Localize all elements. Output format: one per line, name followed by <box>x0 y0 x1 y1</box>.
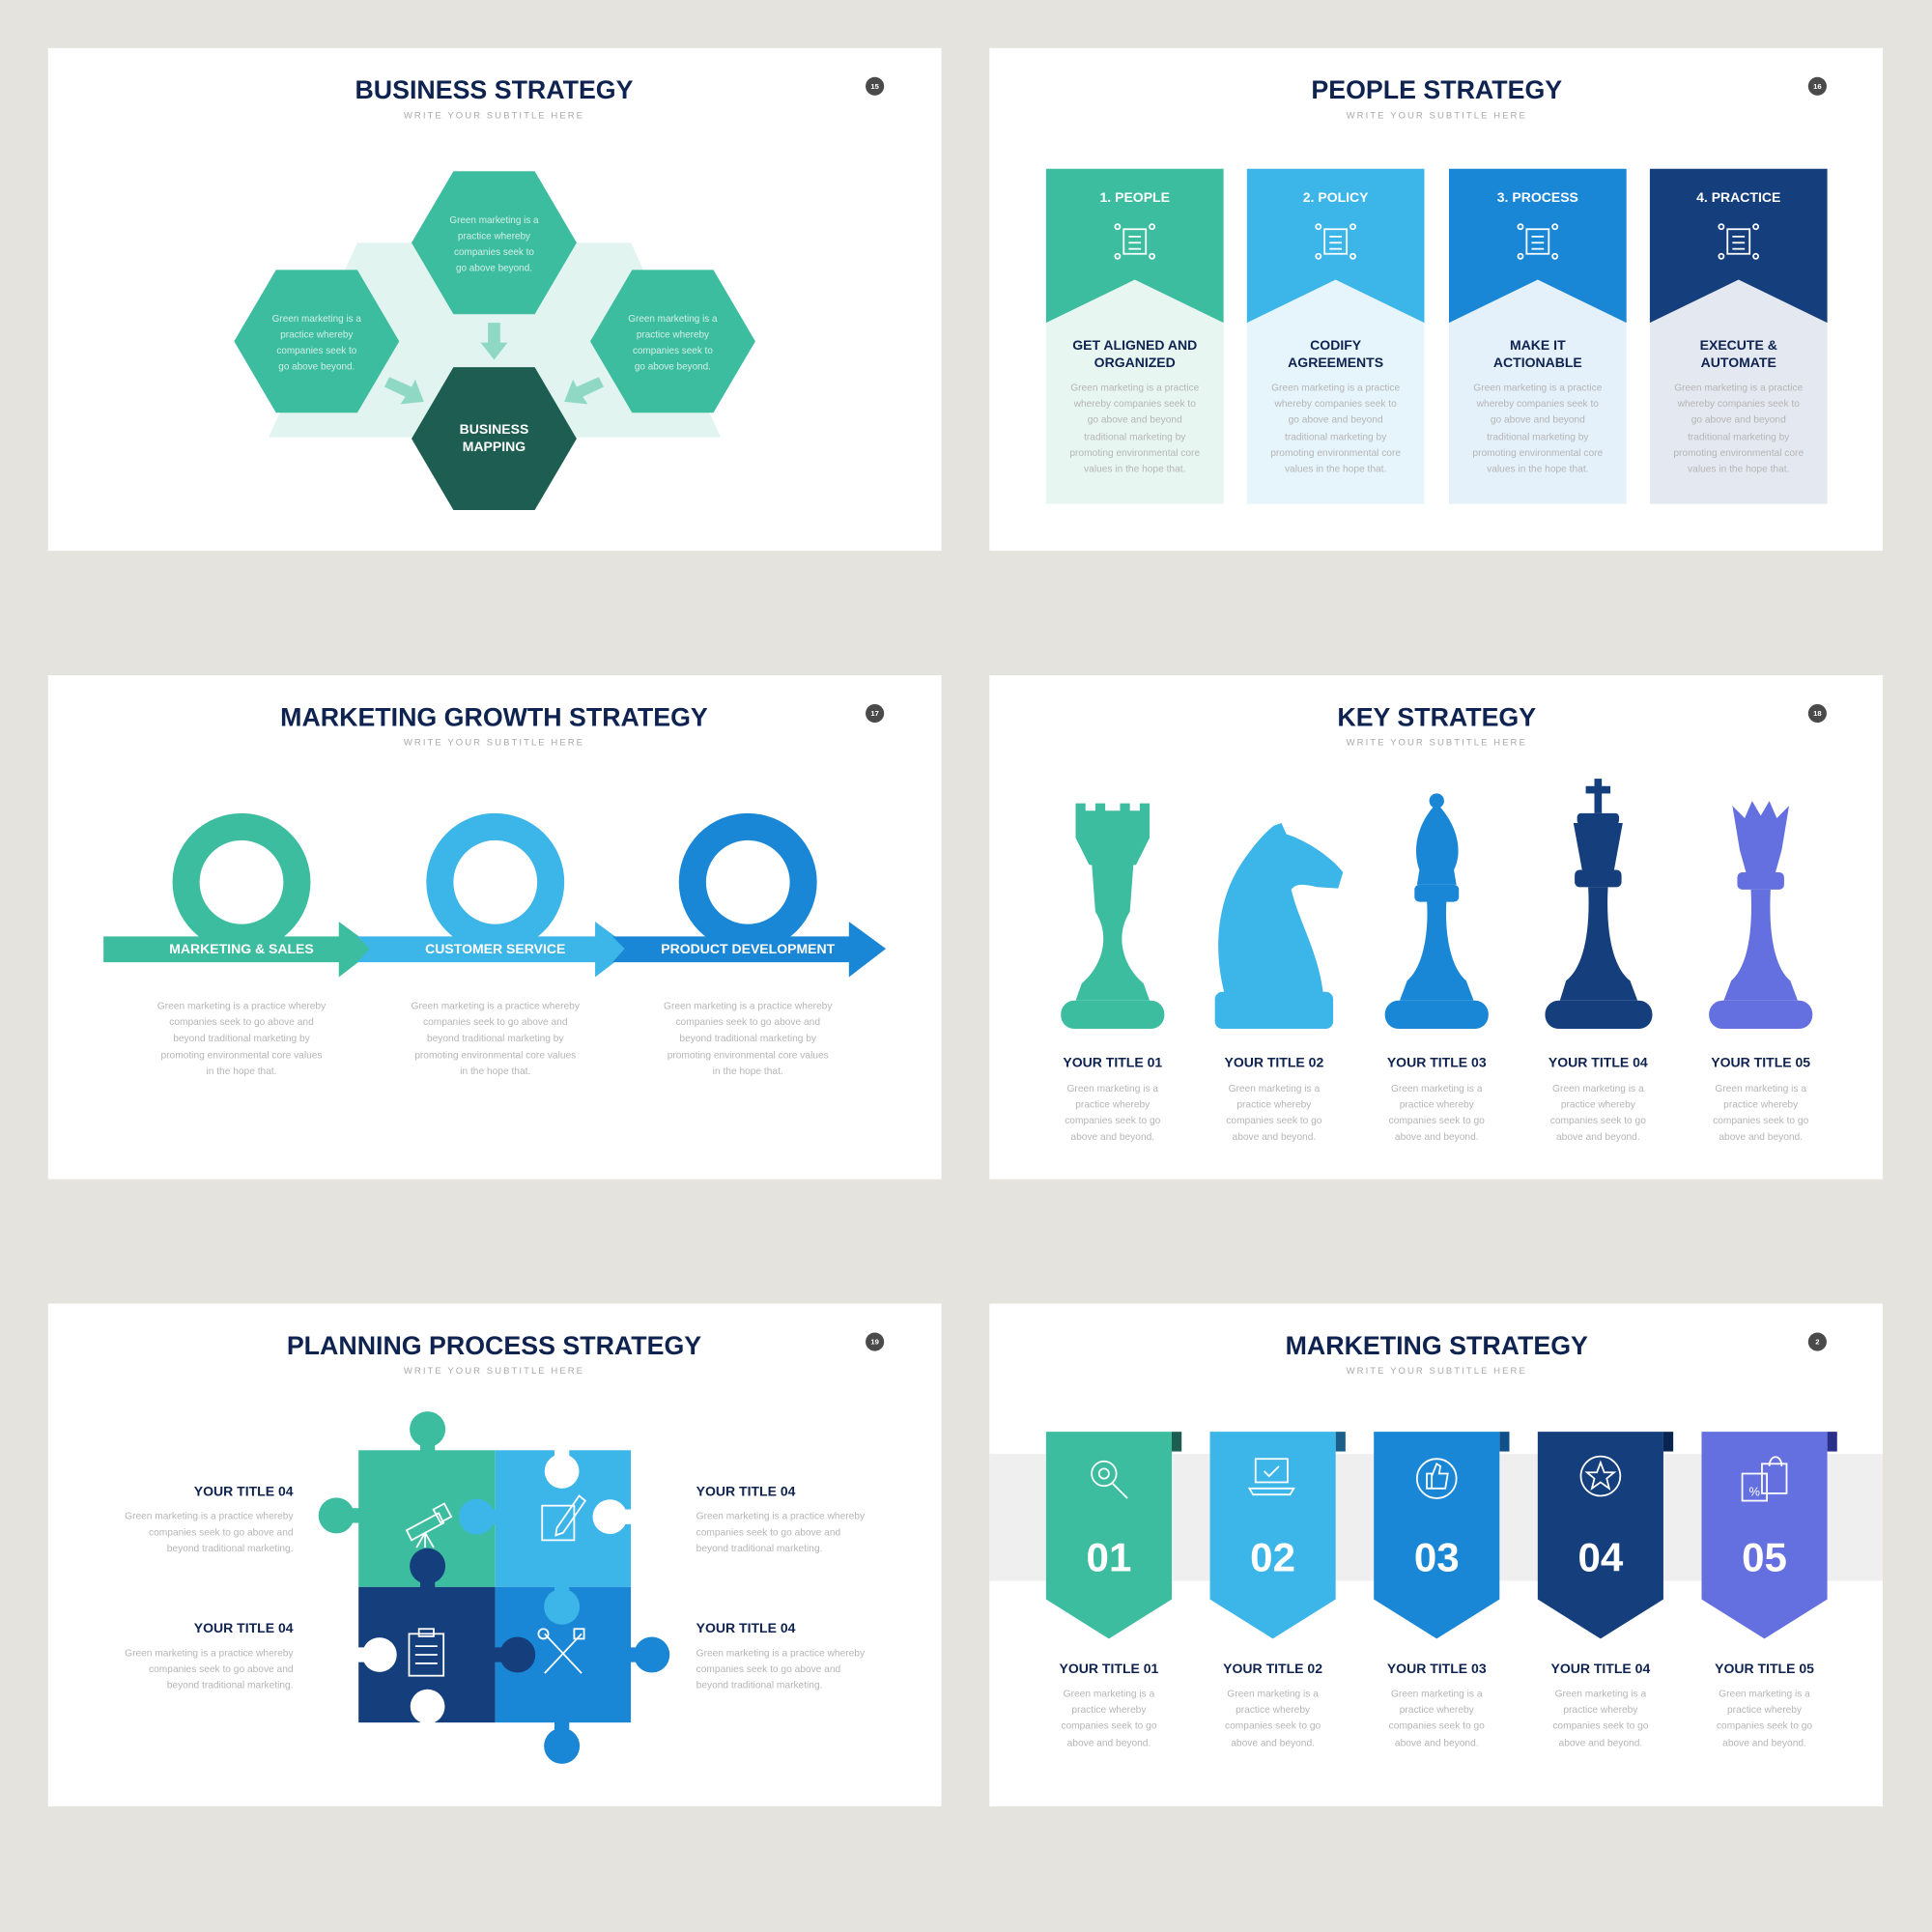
title: PLANNING PROCESS STRATEGY <box>287 1331 701 1360</box>
chess labels: practice whereby <box>1075 1100 1151 1111</box>
text: col 1: in the hope that. <box>206 1066 277 1077</box>
ribbon 04 <box>1538 1432 1673 1638</box>
text: left bottom: beyond traditional marketing. <box>167 1680 294 1690</box>
chess labels: companies seek to go <box>1550 1116 1646 1126</box>
chess: knight <box>1215 823 1343 1029</box>
ring: light blue <box>440 827 551 938</box>
ribbon labels: YOUR TITLE 05 <box>1715 1661 1814 1676</box>
text: col 1: beyond traditional marketing by <box>173 1034 311 1044</box>
column: people: 1. PEOPLE <box>1100 189 1170 205</box>
column: people: GET ALIGNED AND <box>1072 337 1197 353</box>
page number <box>866 704 884 723</box>
column: practice: AUTOMATE <box>1701 355 1776 370</box>
column: practice: Green marketing is a practice <box>1674 383 1804 393</box>
text: right top <box>696 1483 866 1554</box>
arrow: product development <box>612 922 886 977</box>
column: people: traditional marketing by <box>1084 432 1186 442</box>
chess labels: Green marketing is a <box>1715 1084 1806 1094</box>
chess labels: YOUR TITLE 01 <box>1063 1055 1162 1070</box>
column: practice: 4. PRACTICE <box>1696 189 1780 205</box>
column: process: ACTIONABLE <box>1493 355 1582 370</box>
text: col 2 <box>412 1002 581 1077</box>
ribbon labels: companies seek to go <box>1061 1721 1157 1732</box>
chess labels: Green marketing is a <box>1391 1084 1483 1094</box>
column: people: values in the hope that. <box>1084 465 1185 475</box>
ribbon labels: companies seek to go <box>1717 1721 1812 1732</box>
column: practice: traditional marketing by <box>1688 432 1790 442</box>
hexagon: right: practice whereby <box>637 329 709 340</box>
text: right bottom <box>696 1620 866 1690</box>
chess labels: above and beyond. <box>1556 1132 1640 1143</box>
text: col 2: promoting environmental core values <box>414 1051 576 1062</box>
arrow: customer service: CUSTOMER SERVICE <box>425 941 565 956</box>
column: people: whereby companies seek to <box>1073 399 1196 410</box>
text: right bottom: beyond traditional marketing. <box>696 1680 822 1690</box>
ribbon 05: 05 <box>1742 1534 1787 1579</box>
hexagon: left <box>234 270 399 412</box>
text: right bottom: Green marketing is a practice whereby <box>696 1648 866 1659</box>
panel: marketing growth strategy <box>48 675 941 1179</box>
column: people <box>1046 169 1224 504</box>
chess labels: practice whereby <box>1400 1100 1475 1111</box>
subtitle: WRITE YOUR SUBTITLE HERE <box>1347 1366 1527 1377</box>
page number: 19 <box>870 1338 879 1347</box>
hexagon: top: practice whereby <box>458 231 530 242</box>
text: col 2: in the hope that. <box>460 1066 530 1077</box>
chess labels: above and beyond. <box>1719 1132 1803 1143</box>
chess labels: companies seek to go <box>1226 1116 1322 1126</box>
text: col 3: beyond traditional marketing by <box>679 1034 817 1044</box>
subtitle: WRITE YOUR SUBTITLE HERE <box>1347 738 1527 749</box>
chess labels: above and beyond. <box>1233 1132 1316 1143</box>
chess labels: practice whereby <box>1236 1100 1312 1111</box>
arrow: marketing & sales <box>103 922 376 977</box>
hexagon: business mapping: MAPPING <box>463 439 526 454</box>
knobs <box>410 1411 445 1447</box>
column: process: values in the hope that. <box>1487 465 1589 475</box>
column: process: traditional marketing by <box>1487 432 1589 442</box>
panel: key strategy <box>989 675 1883 1179</box>
title: MARKETING STRATEGY <box>1286 1331 1588 1360</box>
hexagon: top: companies seek to <box>454 247 534 258</box>
column: policy: CODIFY <box>1310 337 1362 353</box>
hexagon: top: Green marketing is a <box>449 215 539 226</box>
column: process: promoting environmental core <box>1472 448 1604 459</box>
arrow: customer service <box>357 922 632 977</box>
ring: blue <box>693 827 804 938</box>
column: practice: go above and beyond <box>1691 414 1786 425</box>
column: policy: promoting environmental core <box>1270 448 1401 459</box>
ribbon labels: Green marketing is a <box>1719 1689 1810 1699</box>
chess labels: Green marketing is a <box>1067 1084 1158 1094</box>
text: right top: Green marketing is a practice whereby <box>696 1512 866 1522</box>
gray band <box>989 1454 1883 1580</box>
ribbon labels: companies seek to go <box>1552 1721 1649 1732</box>
ribbon 02: 02 <box>1250 1534 1295 1579</box>
ribbon labels: Green marketing is a <box>1064 1689 1155 1699</box>
column: practice: EXECUTE & <box>1700 337 1777 353</box>
ribbon labels: above and beyond. <box>1067 1738 1151 1748</box>
panel: people strategy <box>989 48 1883 551</box>
text: left bottom <box>125 1620 294 1690</box>
chess labels <box>1063 1055 1810 1143</box>
ribbon labels: companies seek to go <box>1389 1721 1485 1732</box>
page number: 16 <box>1813 82 1822 91</box>
ribbon labels: YOUR TITLE 01 <box>1060 1661 1159 1676</box>
ribbon 01: 01 <box>1087 1534 1131 1579</box>
page number: 17 <box>870 709 879 718</box>
panel: planning process strategy <box>48 1303 941 1806</box>
column: practice: values in the hope that. <box>1688 465 1789 475</box>
chess labels: YOUR TITLE 03 <box>1387 1055 1487 1070</box>
ribbon labels: YOUR TITLE 02 <box>1223 1661 1322 1676</box>
hexagon: right <box>590 270 755 412</box>
subtitle: WRITE YOUR SUBTITLE HERE <box>404 738 584 749</box>
chess labels: Green marketing is a <box>1552 1084 1644 1094</box>
ribbon labels: above and beyond. <box>1395 1738 1479 1748</box>
title: BUSINESS STRATEGY <box>355 75 634 104</box>
panel: marketing strategy <box>989 1303 1883 1806</box>
puzzle <box>319 1411 669 1764</box>
column: people: go above and beyond <box>1088 414 1182 425</box>
column: practice <box>1650 169 1828 504</box>
text: col 1 <box>157 1002 327 1077</box>
subtitle: WRITE YOUR SUBTITLE HERE <box>1347 110 1527 121</box>
arrow: left <box>384 377 424 404</box>
column: process: Green marketing is a practice <box>1473 383 1603 393</box>
ribbon 02 <box>1210 1432 1346 1638</box>
text: col 1: Green marketing is a practice whereby <box>157 1002 327 1012</box>
hexagon: left: go above beyond. <box>278 362 355 373</box>
column: policy: 2. POLICY <box>1303 189 1369 205</box>
ribbon labels: practice whereby <box>1236 1705 1311 1716</box>
page number <box>866 1332 884 1351</box>
text: right top: YOUR TITLE 04 <box>696 1483 796 1498</box>
page number <box>1808 1332 1827 1351</box>
text: left bottom: companies seek to go above and <box>149 1664 294 1675</box>
ribbon 03: 03 <box>1414 1534 1460 1579</box>
text: col 1: promoting environmental core values <box>160 1051 323 1062</box>
page number <box>1808 704 1827 723</box>
column: policy <box>1247 169 1424 504</box>
ribbon labels: practice whereby <box>1727 1705 1803 1716</box>
chess labels: Green marketing is a <box>1229 1084 1320 1094</box>
ribbon labels: practice whereby <box>1563 1705 1638 1716</box>
chess labels: YOUR TITLE 05 <box>1711 1055 1810 1070</box>
chess labels: practice whereby <box>1561 1100 1636 1111</box>
column: policy: whereby companies seek to <box>1274 399 1397 410</box>
icon: telescope <box>407 1504 451 1548</box>
column: process: MAKE IT <box>1510 337 1566 353</box>
arrow: down <box>480 323 508 359</box>
ribbon 05 <box>1701 1432 1837 1638</box>
text: right bottom: companies seek to go above and <box>696 1664 841 1675</box>
title: MARKETING GROWTH STRATEGY <box>280 702 708 731</box>
text: left top <box>125 1483 294 1554</box>
column: practice: whereby companies seek to <box>1677 399 1800 410</box>
chess labels: companies seek to go <box>1713 1116 1809 1126</box>
text: left bottom: Green marketing is a practice whereby <box>125 1648 294 1659</box>
column: people: promoting environmental core <box>1069 448 1200 459</box>
ribbon 01 <box>1046 1432 1181 1638</box>
chess labels: companies seek to go <box>1389 1116 1485 1126</box>
text: col 3: Green marketing is a practice whereby <box>664 1002 833 1012</box>
text: col 2: companies seek to go above and <box>423 1017 568 1028</box>
panel: business strategy <box>48 48 941 551</box>
text: right top: beyond traditional marketing. <box>696 1544 822 1554</box>
page number: 2 <box>1815 1338 1820 1347</box>
text: col 3: promoting environmental core values <box>668 1051 829 1062</box>
page number <box>1808 77 1827 96</box>
text: col 2: beyond traditional marketing by <box>427 1034 564 1044</box>
column: process: whereby companies seek to <box>1476 399 1599 410</box>
ribbon labels: Green marketing is a <box>1555 1689 1646 1699</box>
column: process <box>1449 169 1627 504</box>
column: policy: Green marketing is a practice <box>1271 383 1401 393</box>
icon: pencil note <box>542 1495 585 1540</box>
chess labels: practice whereby <box>1723 1100 1799 1111</box>
text: left top: Green marketing is a practice whereby <box>125 1512 294 1522</box>
hexagon: right: Green marketing is a <box>628 314 718 325</box>
ribbon 05: % <box>1749 1484 1760 1498</box>
text: col 3 <box>664 1002 833 1077</box>
ring: green <box>186 827 297 938</box>
column: policy: go above and beyond <box>1289 414 1383 425</box>
text: col 3: companies seek to go above and <box>675 1017 820 1028</box>
column: people: ORGANIZED <box>1094 355 1176 370</box>
chess labels: companies seek to go <box>1065 1116 1161 1126</box>
ribbon labels: above and beyond. <box>1559 1738 1642 1748</box>
column: policy: AGREEMENTS <box>1288 355 1383 370</box>
column: process: 3. PROCESS <box>1497 189 1578 205</box>
text: col 1: companies seek to go above and <box>169 1017 314 1028</box>
page number: 15 <box>870 82 880 91</box>
title: KEY STRATEGY <box>1337 702 1536 731</box>
ribbon labels: above and beyond. <box>1231 1738 1315 1748</box>
icon: tools <box>538 1629 584 1673</box>
ribbon labels: YOUR TITLE 04 <box>1550 1661 1650 1676</box>
ribbon labels: practice whereby <box>1071 1705 1147 1716</box>
column: process: go above and beyond <box>1491 414 1585 425</box>
subtitle: WRITE YOUR SUBTITLE HERE <box>404 1366 584 1377</box>
text: col 2: Green marketing is a practice whereby <box>412 1002 581 1012</box>
text: right bottom: YOUR TITLE 04 <box>696 1620 796 1635</box>
hexagon: right: companies seek to <box>633 346 713 356</box>
text: left top: beyond traditional marketing. <box>167 1544 294 1554</box>
hexagon: right: go above beyond. <box>635 362 711 373</box>
chess labels: YOUR TITLE 04 <box>1548 1055 1648 1070</box>
subtitle: WRITE YOUR SUBTITLE HERE <box>404 110 584 121</box>
text: left top: YOUR TITLE 04 <box>194 1483 294 1498</box>
hexagon: top: go above beyond. <box>456 264 532 274</box>
column: practice: promoting environmental core <box>1673 448 1804 459</box>
text: left top: companies seek to go above and <box>149 1527 294 1538</box>
ribbon labels: Green marketing is a <box>1227 1689 1319 1699</box>
hexagon: left: Green marketing is a <box>272 314 361 325</box>
chess labels: YOUR TITLE 02 <box>1224 1055 1323 1070</box>
page number <box>866 77 884 96</box>
title: PEOPLE STRATEGY <box>1311 75 1562 104</box>
arrow: product development: PRODUCT DEVELOPMENT <box>661 941 836 956</box>
text: col 3: in the hope that. <box>713 1066 783 1077</box>
hexagon: left: practice whereby <box>280 329 353 340</box>
ribbon labels: above and beyond. <box>1722 1738 1806 1748</box>
text: left bottom: YOUR TITLE 04 <box>194 1620 294 1635</box>
ribbon labels: YOUR TITLE 03 <box>1387 1661 1487 1676</box>
arrow: right <box>564 377 604 404</box>
hexagon: business mapping: BUSINESS <box>460 421 528 437</box>
hexagon: business mapping <box>412 367 577 510</box>
chess: rook <box>1061 804 1164 1029</box>
chess: queen <box>1709 801 1812 1029</box>
ribbon labels: companies seek to go <box>1225 1721 1321 1732</box>
chess: king <box>1545 779 1652 1029</box>
chess: bishop <box>1385 793 1489 1029</box>
hexagon: left: companies seek to <box>276 346 357 356</box>
chess labels: above and beyond. <box>1395 1132 1479 1143</box>
column: people: Green marketing is a practice <box>1070 383 1200 393</box>
page number: 18 <box>1813 709 1822 718</box>
column: policy: values in the hope that. <box>1285 465 1386 475</box>
ribbon labels <box>1060 1661 1814 1748</box>
column: policy: traditional marketing by <box>1285 432 1387 442</box>
text: right top: companies seek to go above and <box>696 1527 841 1538</box>
ribbon labels: practice whereby <box>1400 1705 1475 1716</box>
chess labels: above and beyond. <box>1070 1132 1154 1143</box>
hexagon background band <box>269 242 721 438</box>
ribbon 03 <box>1374 1432 1509 1638</box>
arrow: marketing & sales: MARKETING & SALES <box>169 941 314 956</box>
ribbon labels: Green marketing is a <box>1391 1689 1483 1699</box>
hexagon: top <box>412 171 577 314</box>
ribbon 04: 04 <box>1577 1534 1624 1579</box>
icon: clipboard <box>409 1629 443 1676</box>
